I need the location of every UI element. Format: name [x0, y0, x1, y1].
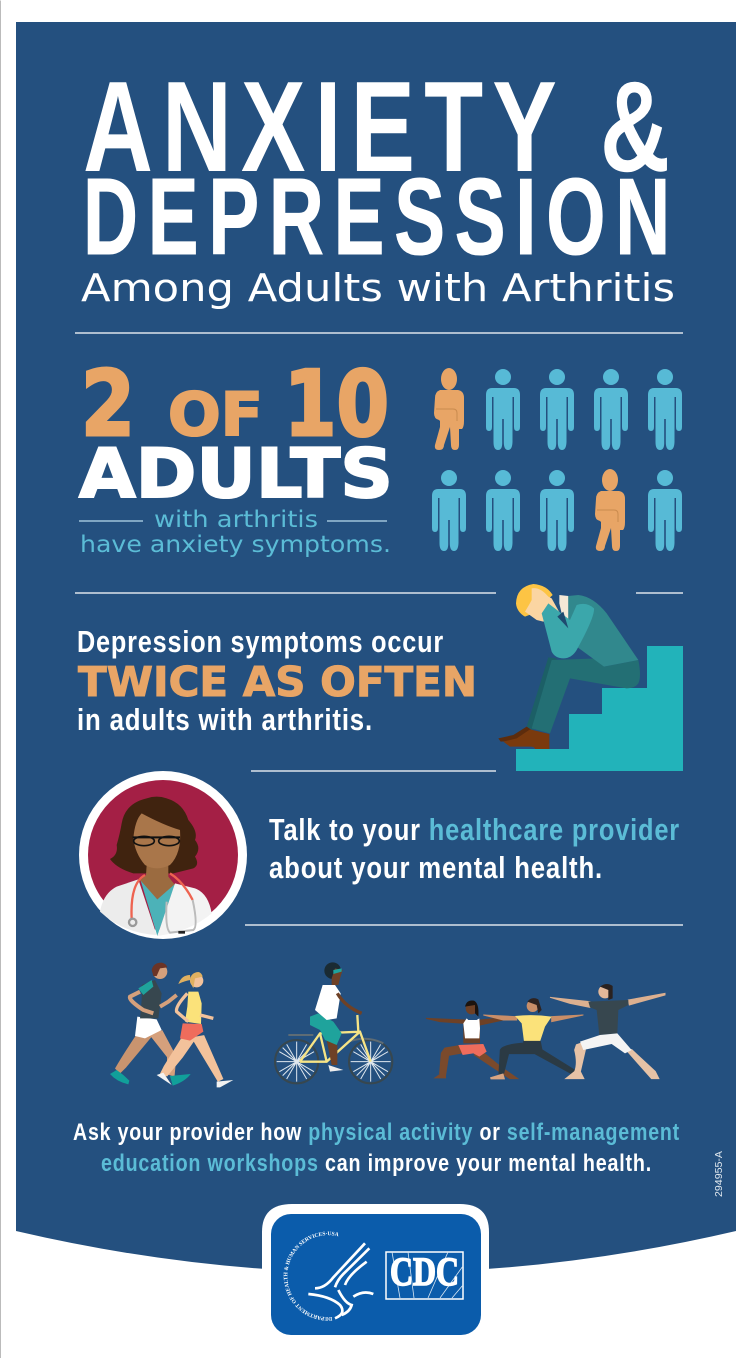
pictogram: 10 adults — [432, 368, 682, 551]
statistic: 2 of 10 adults: 10 — [284, 352, 389, 457]
logo badge — [262, 1204, 489, 1335]
depression text: TWICE AS OFTEN — [78, 658, 477, 706]
illustration: runners — [110, 963, 233, 1087]
publication code: 294955-A — [714, 1151, 725, 1197]
statistic: 2 of 10 adults — [79, 352, 393, 558]
talk to provider text: Talk to your healthcare provider — [269, 812, 680, 847]
call to action text — [73, 1119, 680, 1177]
depression text: Depression symptoms occur — [77, 624, 444, 659]
frame edge — [0, 0, 2, 1358]
illustration: yoga group — [426, 984, 665, 1079]
statistic: 2 of 10 adults: 2 — [81, 352, 135, 457]
HHS seal: DEPARTMENT OF HEALTH & HUMAN SERVICES·USA — [284, 1232, 338, 1321]
statistic: 2 of 10 adults: with arthritis — [154, 507, 318, 533]
depression text: in adults with arthritis. — [77, 702, 373, 737]
title: Among Adults with Arthritis — [81, 266, 675, 310]
talk to provider text: about your mental health. — [269, 850, 603, 885]
depression text — [77, 624, 477, 737]
talk to provider text — [269, 812, 680, 885]
illustration: man on stairs — [498, 584, 683, 771]
statistic: 2 of 10 adults: OF — [168, 380, 263, 450]
call to action text: Ask your provider how physical activity or self-management — [73, 1119, 680, 1146]
statistic: 2 of 10 adults: have anxiety symptoms. — [80, 532, 391, 558]
divider lines — [75, 333, 683, 925]
statistic: 2 of 10 adults: ADULTS — [79, 435, 393, 514]
HHS seal — [284, 1232, 374, 1321]
CDC logo: CDC — [390, 1249, 459, 1294]
call to action text: education workshops can improve your mental health. — [101, 1150, 652, 1177]
title — [81, 55, 680, 310]
illustration: cyclist — [275, 962, 392, 1083]
illustration: doctor portrait — [79, 771, 247, 939]
